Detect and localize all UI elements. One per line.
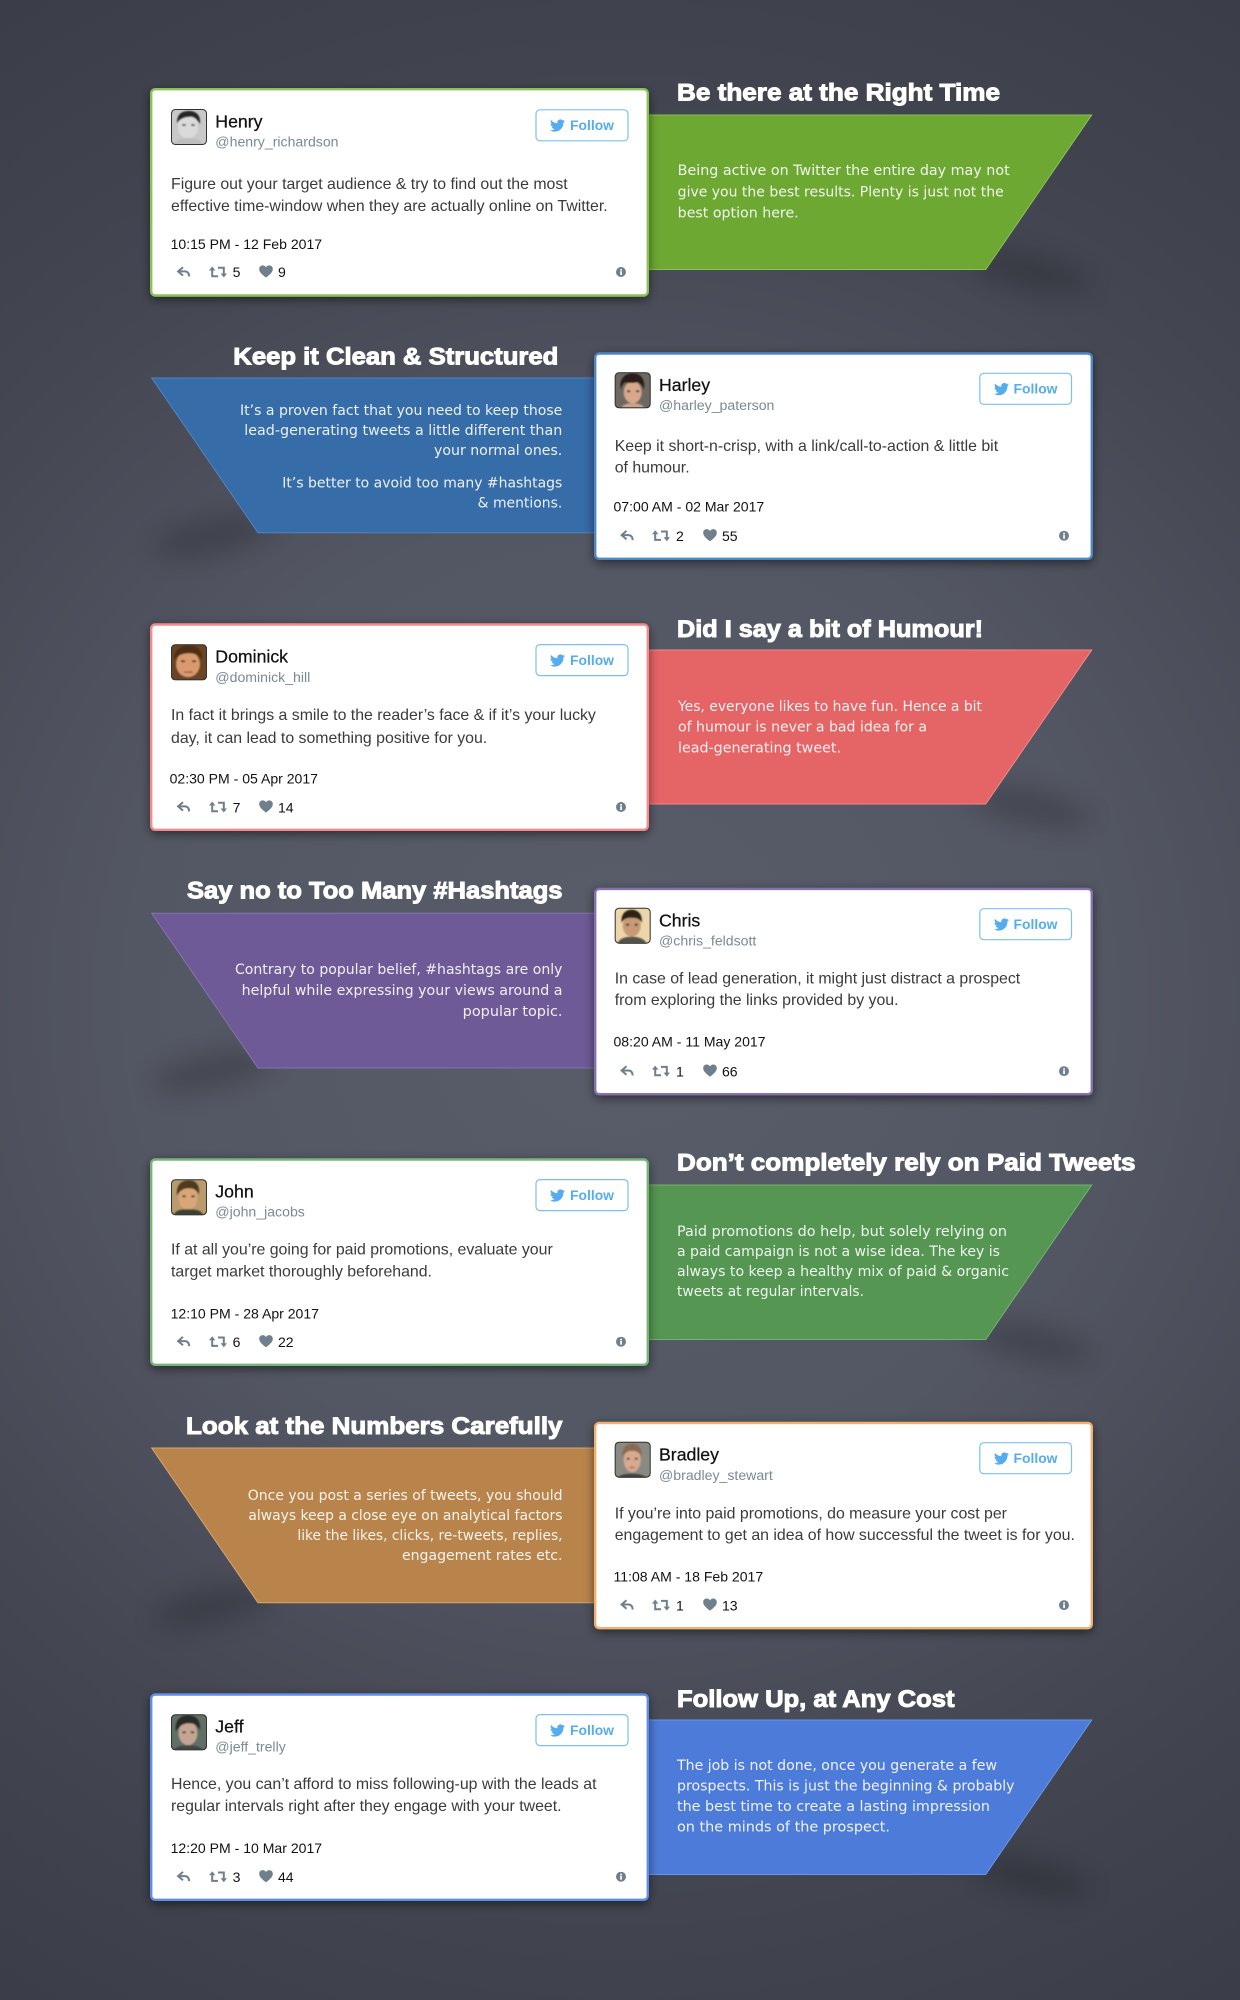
tweet text: Keep it short-n-crisp, with a link/call-to-action & little bit <box>615 438 999 455</box>
follow button: Follow <box>570 117 614 133</box>
band text <box>678 163 1010 222</box>
tweet card: Chris: 08:20 AM - 11 May 2017 <box>614 1034 766 1050</box>
actions <box>178 1869 626 1885</box>
tweet text: In fact it brings a smile to the reader’s face & if it’s your lucky <box>171 707 596 724</box>
actions: 9 <box>278 264 286 280</box>
band text <box>240 403 562 512</box>
tweet card: Jeff: @jeff_trelly <box>215 1739 287 1755</box>
actions: 7 <box>233 799 241 815</box>
panel: blue band <box>152 378 602 533</box>
band text: prospects. This is just the beginning & probably <box>677 1779 1014 1795</box>
tweet text: target market thoroughly beforehand. <box>171 1264 432 1281</box>
band text: your normal ones. <box>434 443 562 459</box>
tweet card: Henry: @henry_richardson <box>215 134 339 150</box>
tweet text <box>615 970 1021 1009</box>
tweet text: If at all you’re going for paid promotions, evaluate your <box>171 1241 553 1258</box>
follow button <box>536 1715 628 1746</box>
tweet card: Chris: Chris <box>659 911 700 931</box>
actions: 14 <box>278 799 294 815</box>
tweet text <box>171 176 608 215</box>
band text: Contrary to popular belief, #hashtags are only <box>235 962 562 978</box>
band text: give you the best results. Plenty is just not the <box>678 185 1004 201</box>
section: Say no to Too Many #Hashtags <box>150 878 602 1100</box>
tweet text: from exploring the links provided by you. <box>615 992 899 1009</box>
section: Keep it Clean & Structured <box>150 343 602 565</box>
band text: the best time to create a lasting impression <box>677 1799 990 1815</box>
tweet text: day, it can lead to something positive for you. <box>171 730 487 747</box>
tweet card: Bradley: Bradley <box>659 1445 719 1465</box>
band text: always keep a close eye on analytical factors <box>248 1508 562 1524</box>
band text: It’s a proven fact that you need to keep those <box>240 403 562 419</box>
avatar: Harley <box>615 372 651 408</box>
section: Did I say a bit of Humour! <box>625 616 1094 836</box>
follow button <box>536 110 628 141</box>
band text: Yes, everyone likes to have fun. Hence a bit <box>677 699 983 715</box>
tweet card: John <box>151 1160 648 1365</box>
band text: The job is not done, once you generate a few <box>676 1758 997 1774</box>
panel: green band <box>625 115 1092 270</box>
tweet text <box>171 1241 553 1281</box>
band shadow <box>966 1848 1094 1906</box>
tweet card: Harley: @harley_paterson <box>659 397 774 413</box>
panel: red band <box>625 650 1092 804</box>
actions: 1 <box>676 1063 684 1079</box>
heading: Look at the Numbers Carefully <box>186 1413 563 1440</box>
band shadow <box>966 778 1094 836</box>
tweet text: In case of lead generation, it might just distract a prospect <box>615 970 1021 987</box>
tweet card: Bradley <box>595 1423 1092 1628</box>
tweet card: Chris: @chris_feldsott <box>659 932 756 948</box>
band text: & mentions. <box>478 496 562 512</box>
actions: 22 <box>278 1334 294 1350</box>
tweet text <box>615 1505 1075 1544</box>
band text <box>677 1224 1009 1300</box>
band text <box>235 962 562 1020</box>
avatar: Jeff <box>171 1714 207 1750</box>
actions: 55 <box>722 528 738 544</box>
band text: a paid campaign is not a wise idea. The key is <box>677 1244 1000 1260</box>
tweet card: Harley <box>595 354 1092 559</box>
actions: 1 <box>676 1597 684 1613</box>
tweet card: Bradley: 11:08 AM - 18 Feb 2017 <box>614 1569 763 1585</box>
band text: Paid promotions do help, but solely relying on <box>677 1224 1007 1240</box>
band text: engagement rates etc. <box>402 1548 562 1564</box>
panel: orange band <box>152 1448 602 1603</box>
heading: Did I say a bit of Humour! <box>677 616 983 643</box>
band shadow <box>150 1042 278 1100</box>
heading: Don’t completely rely on Paid Tweets <box>677 1150 1136 1176</box>
tweet text: of humour. <box>615 460 690 477</box>
actions: 5 <box>233 264 241 280</box>
follow button: Follow <box>1014 1450 1058 1466</box>
panel: dark green band <box>625 1185 1092 1340</box>
tweet text: regular intervals right after they engage with your tweet. <box>171 1798 562 1815</box>
follow button: Follow <box>1014 381 1058 397</box>
follow button <box>980 1443 1072 1474</box>
band text: Once you post a series of tweets, you should <box>248 1488 563 1504</box>
tweet text <box>171 1776 597 1815</box>
tweet card: Henry: 10:15 PM - 12 Feb 2017 <box>171 236 322 252</box>
tweet card: John: John <box>215 1181 254 1201</box>
band text: always to keep a healthy mix of paid & organic <box>677 1264 1009 1280</box>
band text: It’s better to avoid too many #hashtags <box>282 475 562 491</box>
actions <box>622 528 1069 544</box>
tweet card: Jeff: 12:20 PM - 10 Mar 2017 <box>171 1840 322 1856</box>
tweet card: Jeff <box>151 1694 648 1900</box>
tweet card: John: @john_jacobs <box>215 1204 305 1220</box>
band text: lead-generating tweet. <box>678 740 841 756</box>
tweet text <box>171 707 596 747</box>
tweet text: Hence, you can’t afford to miss following-up with the leads at <box>171 1776 597 1793</box>
band text: Being active on Twitter the entire day may not <box>678 163 1010 179</box>
band text: on the minds of the prospect. <box>677 1820 890 1836</box>
follow button <box>536 645 628 676</box>
band shadow <box>150 1577 278 1635</box>
actions: 13 <box>722 1597 738 1613</box>
tweet text: If you’re into paid promotions, do measure your cost per <box>615 1505 1008 1522</box>
follow button <box>980 909 1072 940</box>
band text: like the likes, clicks, re-tweets, replies, <box>297 1528 562 1544</box>
actions <box>622 1597 1069 1613</box>
actions: 6 <box>233 1334 241 1350</box>
band text: lead-generating tweets a little different than <box>244 423 562 439</box>
tweet card: Harley: 07:00 AM - 02 Mar 2017 <box>614 499 764 515</box>
band text <box>677 699 983 756</box>
follow button: Follow <box>570 1187 614 1203</box>
tweet text: Figure out your target audience & try to find out the most <box>171 176 568 193</box>
follow button: Follow <box>570 652 614 668</box>
section: Look at the Numbers Carefully <box>150 1413 602 1635</box>
actions <box>178 264 626 280</box>
heading: Keep it Clean & Structured <box>233 343 558 370</box>
tweet card: Henry <box>151 89 648 296</box>
avatar: Chris <box>615 908 651 944</box>
tweet text: engagement to get an idea of how successful the tweet is for you. <box>615 1527 1075 1544</box>
band shadow <box>150 507 278 565</box>
tweet card: Dominick <box>151 624 648 830</box>
band text: of humour is never a bad idea for a <box>678 720 927 736</box>
actions: 3 <box>233 1869 241 1885</box>
actions: 44 <box>278 1869 294 1885</box>
heading: Follow Up, at Any Cost <box>677 1686 955 1713</box>
band shadow <box>966 1313 1094 1371</box>
tweet text: effective time-window when they are actually online on Twitter. <box>171 198 608 215</box>
actions: 66 <box>722 1063 738 1079</box>
tweet text <box>615 438 999 477</box>
tweet card: Henry: Henry <box>215 112 263 132</box>
band text: best option here. <box>678 206 799 222</box>
band text: popular topic. <box>463 1004 562 1020</box>
tweet card: John: 12:10 PM - 28 Apr 2017 <box>171 1305 319 1321</box>
tweet card: Dominick: Dominick <box>215 647 288 667</box>
band shadow <box>966 243 1094 301</box>
tweet card: Chris <box>595 889 1092 1094</box>
follow button: Follow <box>570 1722 614 1738</box>
avatar: John <box>171 1179 207 1215</box>
band text <box>248 1488 563 1564</box>
panel: bright blue band <box>625 1720 1092 1874</box>
band text: tweets at regular intervals. <box>677 1284 864 1300</box>
band text: helpful while expressing your views around a <box>242 983 562 999</box>
section: Be there at the Right Time <box>625 80 1094 301</box>
heading: Be there at the Right Time <box>677 80 1000 107</box>
tweet card: Bradley: @bradley_stewart <box>659 1467 773 1483</box>
tweet card: Dominick: @dominick_hill <box>215 669 310 685</box>
follow button <box>536 1180 628 1211</box>
tweet card: Jeff: Jeff <box>215 1716 244 1736</box>
avatar: Henry <box>171 109 207 145</box>
band text <box>676 1758 1014 1836</box>
follow button: Follow <box>1014 916 1058 932</box>
tweet card: Harley: Harley <box>659 375 710 395</box>
heading: Say no to Too Many #Hashtags <box>187 878 562 904</box>
actions <box>178 799 626 815</box>
panel: purple band <box>152 913 602 1068</box>
avatar: Bradley <box>615 1442 651 1478</box>
avatar: Dominick <box>171 644 207 680</box>
actions <box>178 1334 626 1350</box>
section: Don't completely rely on Paid Tweets <box>625 1150 1136 1371</box>
tweet card: Dominick: 02:30 PM - 05 Apr 2017 <box>170 771 318 787</box>
actions: 2 <box>676 528 684 544</box>
follow button <box>980 373 1072 404</box>
actions <box>622 1063 1069 1079</box>
section: Follow Up, at Any Cost <box>625 1686 1094 1906</box>
